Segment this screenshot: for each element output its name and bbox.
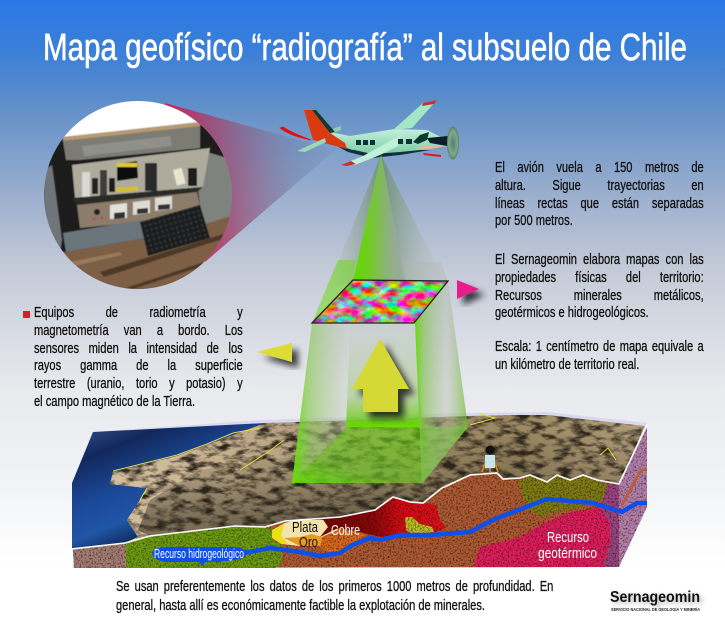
text: equipment on board — [34, 304, 243, 410]
soil: copper red — [320, 497, 446, 538]
text: flight height — [495, 159, 704, 229]
text: equipment on board: rayos gamma de la superficie — [34, 357, 243, 374]
zone labels: Recurso hidrogeológico — [154, 546, 244, 561]
text: equipment on board: terrestre (uranio, torio y potasio) y — [34, 375, 243, 392]
text: equipment on board: Equipos de radiometría y — [34, 304, 243, 321]
photo circle: onboard equipment — [40, 100, 234, 290]
text: equipment on board: el campo magnético de la Tierra. — [34, 393, 195, 410]
zone labels: Cobre — [331, 522, 360, 539]
soil: magenta zone — [600, 484, 619, 567]
text: maps: Recursos minerales metálicos, — [495, 287, 704, 304]
red under-wing strip — [423, 153, 441, 157]
text: scale — [495, 338, 704, 373]
text: equipment on board: sensores miden la intensidad de los — [34, 340, 243, 357]
text: flight height: El avión vuela a 150 metros de — [495, 159, 704, 176]
text: depth note: general, hasta allí es económicamente factible la explotación de minerales. — [116, 597, 485, 614]
geophysical map sheet — [312, 280, 448, 323]
back haze — [93, 412, 647, 436]
arrow: right pink — [457, 280, 479, 299]
land surface — [110, 415, 645, 543]
green scan beam — [292, 155, 468, 483]
beam upper centre — [353, 155, 405, 281]
soil: silver and gold — [272, 520, 338, 546]
beam left panel — [292, 323, 350, 483]
cockpit and nose — [413, 132, 429, 144]
zone labels: Recurso — [547, 529, 589, 546]
fuselage — [313, 129, 447, 154]
text: scale: un kilómetro de territorio real. — [495, 356, 639, 373]
beam upper left side — [327, 155, 381, 290]
text: flight height: por 500 metros. — [495, 212, 573, 229]
beam right shoulder — [405, 262, 448, 281]
soil: olive zone — [518, 475, 607, 517]
text: flight height: líneas rectas que están separadas — [495, 195, 704, 212]
soil: left stratum — [73, 543, 126, 568]
beam left shoulder — [312, 260, 356, 323]
logo: Sernageomin: Sernageomin — [613, 591, 703, 608]
tail fin — [304, 110, 347, 149]
zone labels: geotérmico — [538, 545, 597, 562]
propeller disc — [447, 126, 459, 160]
lower tailplane — [297, 138, 326, 152]
subsoil base — [72, 473, 619, 568]
lower wing — [341, 135, 401, 165]
beam right panel — [415, 281, 468, 483]
right side face — [619, 425, 647, 567]
logo: Sernageomin: SERVICIO NACIONAL DE GEOLOGÍA Y MINERÍA — [611, 607, 701, 612]
lower wing shadow band — [326, 140, 430, 158]
soil: orange copper halo — [296, 520, 368, 554]
red antenna wisp — [280, 127, 311, 140]
terrain block — [72, 412, 647, 568]
groundwater river — [244, 499, 647, 556]
text: maps: geotérmicos e hidrogeológicos. — [495, 304, 649, 321]
yellow coast and boundary lines — [113, 414, 616, 500]
airplane — [280, 100, 459, 166]
text: scale: Escala: 1 centímetro de mapa equivale a — [495, 338, 704, 355]
beam upper right side — [381, 155, 445, 281]
red bullet — [23, 311, 30, 318]
arrow: up — [352, 339, 409, 412]
text: maps — [495, 251, 704, 321]
beam back panel — [346, 323, 422, 427]
field instrument person — [482, 446, 498, 472]
text: depth note: Se usan preferentemente los datos de los primeros 1000 metros de profundidad. En — [116, 578, 553, 595]
ocean — [72, 423, 265, 549]
soil: geothermal zone — [473, 507, 610, 567]
text: flight height: altura. Sigue trayectorias en — [495, 177, 704, 194]
left edge and surface line — [72, 425, 647, 568]
text: depth note — [116, 578, 553, 614]
arrow: left yellow — [257, 343, 292, 362]
land relief shading — [138, 426, 645, 536]
soil: green-yellow ore — [405, 517, 434, 535]
upper wing — [393, 100, 437, 130]
text: equipment on board: magnetometría van a bordo. Los — [34, 322, 243, 339]
zone labels: Oro — [299, 534, 318, 551]
magnifying cone from photo to plane — [165, 103, 335, 262]
upper tailplane — [327, 126, 341, 134]
logo: Sernageomin: Sernageomin — [610, 589, 700, 606]
text: maps: El Sernageomin elabora mapas con las — [495, 251, 704, 268]
beam floor on terrain — [292, 427, 468, 483]
cabin windows — [356, 139, 412, 145]
text: maps: propiedades físicas del territorio: — [495, 269, 704, 286]
orange streak on side face — [622, 468, 646, 505]
zone labels — [154, 519, 597, 562]
groundwater blob — [152, 547, 246, 566]
soil: green hydrogeological stratum — [126, 526, 282, 568]
zone labels: Plata — [292, 519, 318, 536]
